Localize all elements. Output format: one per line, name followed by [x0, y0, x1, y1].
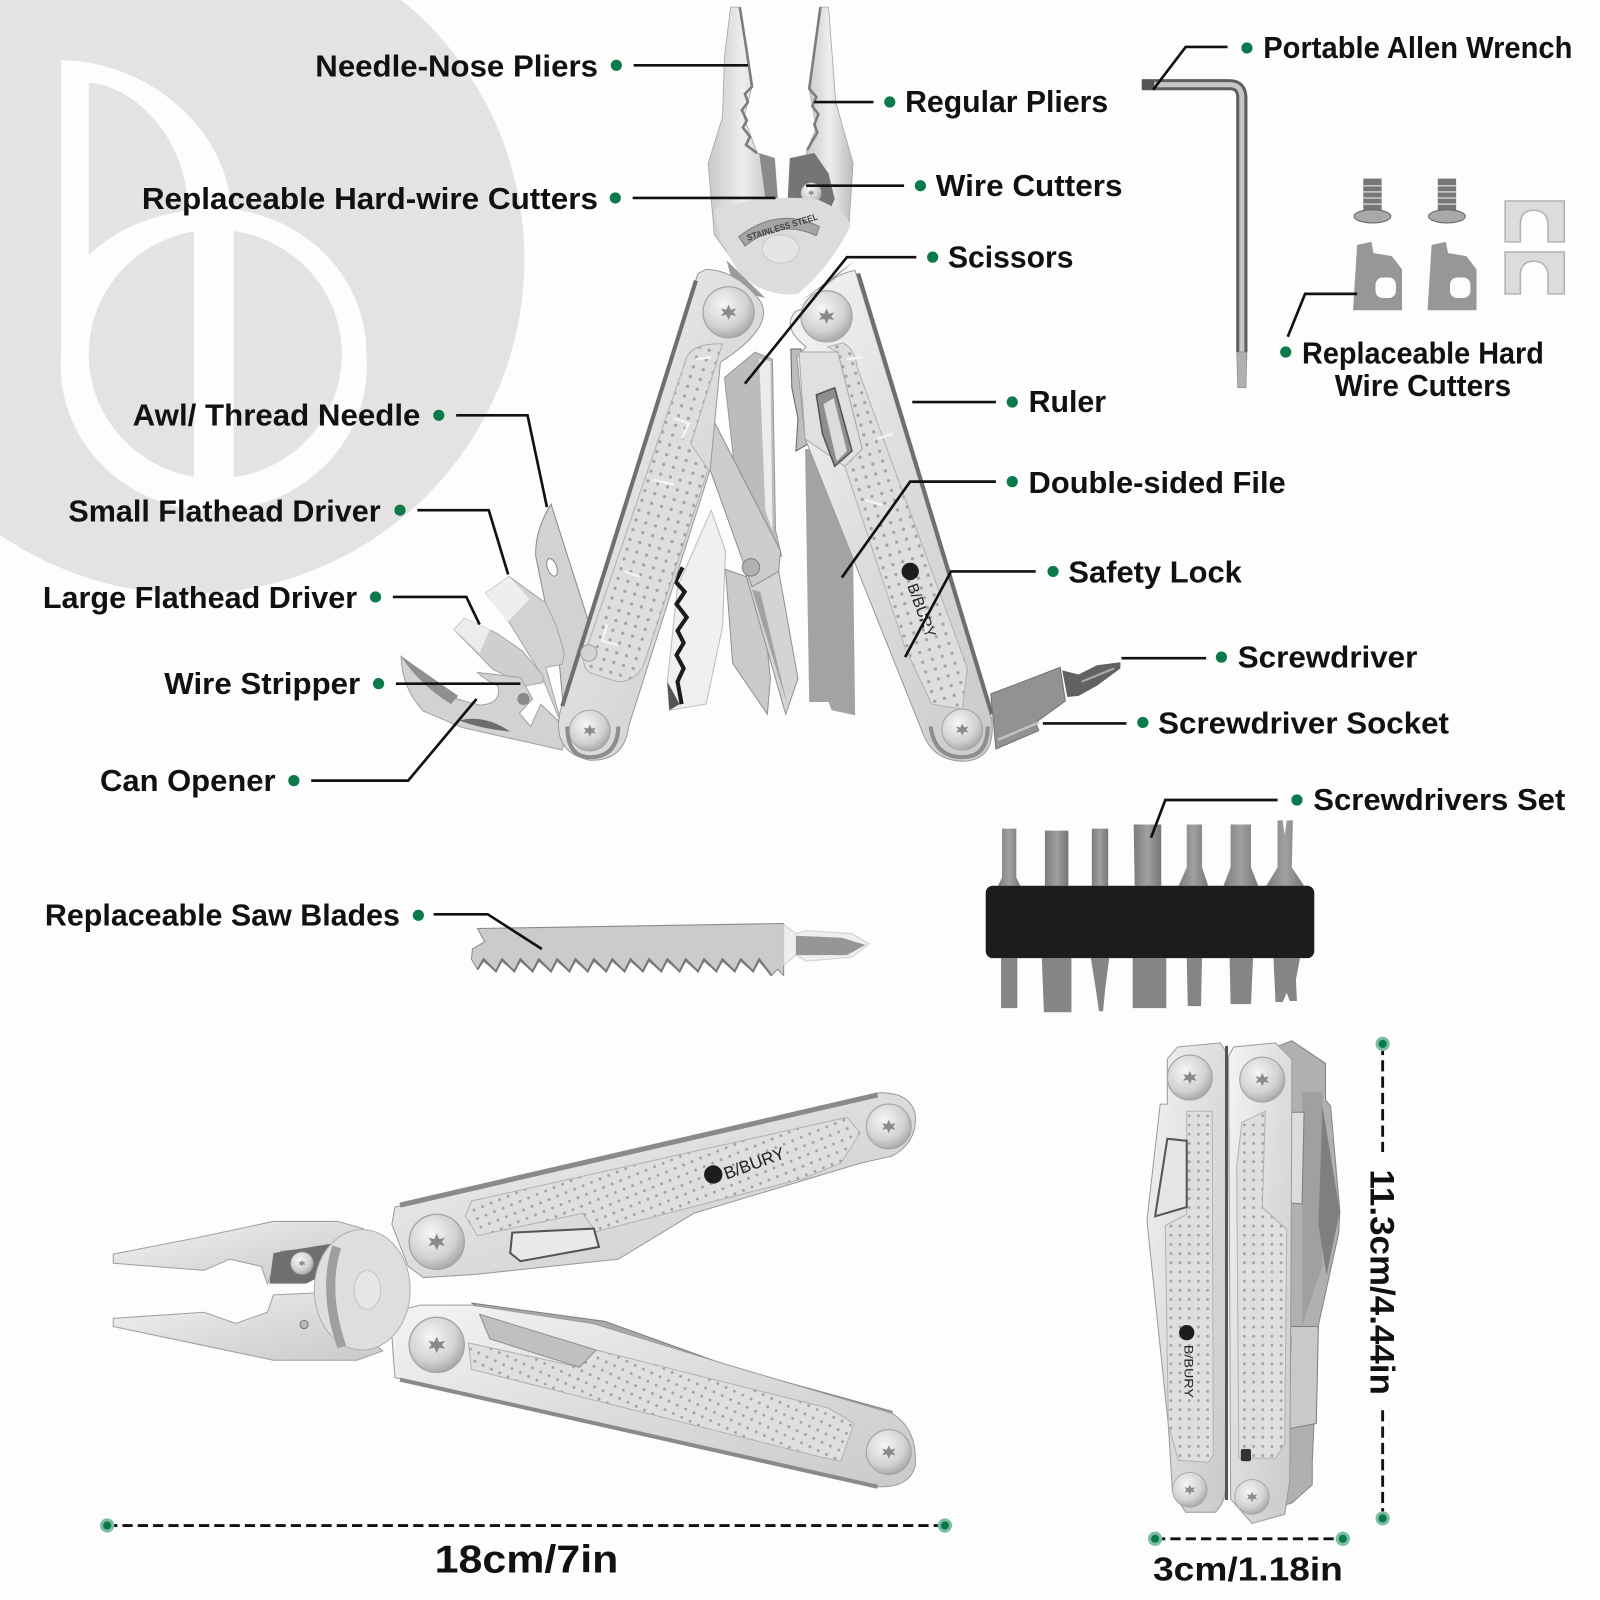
screwdriver bit set — [986, 820, 1314, 1012]
dimension: 11.3cm height: 11.3cm/4.44in — [1362, 1169, 1400, 1395]
folded left handle — [1147, 1043, 1226, 1512]
cutter 1 — [1353, 242, 1402, 310]
latch — [791, 349, 808, 451]
label: Portable Allen Wrench — [1153, 31, 1572, 90]
gray linkage behind head — [727, 260, 855, 301]
needle-nose jaw — [708, 7, 778, 265]
label: Ruler: Ruler — [1029, 385, 1106, 419]
folded left handle: B/BURY — [1182, 1345, 1196, 1398]
label: Replaceable Hard Wire Cutters: Replaceable Hard — [1302, 336, 1544, 370]
label: Double-sided File — [842, 466, 1286, 578]
label: Replaceable Hard Wire Cutters: Wire Cutters — [1335, 369, 1511, 403]
tools behind lower handle — [471, 1303, 898, 1449]
label: Replaceable Saw Blades: Replaceable Saw Blades — [45, 899, 400, 933]
label: Small Flathead Driver — [68, 494, 508, 574]
label: Ruler — [912, 385, 1106, 419]
upper jaw — [113, 1221, 363, 1284]
label: Replaceable Hard Wire Cutters — [1280, 294, 1544, 403]
label: Replaceable Saw Blades — [45, 899, 542, 949]
label: Wire Cutters: Wire Cutters — [936, 169, 1122, 203]
label: Replaceable Hard-wire Cutters: Replaceable Hard-wire Cutters — [142, 182, 598, 216]
cutter 2 — [1428, 242, 1477, 310]
pivot head — [714, 198, 850, 294]
spare screw 2 — [1429, 179, 1465, 223]
label: Screwdriver Socket — [1043, 707, 1449, 741]
screwdriver bit — [1062, 662, 1120, 697]
folded tool: small flathead — [486, 577, 564, 727]
dimension: 3cm width: 3cm/1.18in — [1153, 1552, 1343, 1589]
right handle — [790, 270, 992, 761]
side tool stack — [1265, 1041, 1340, 1510]
folded right handle — [1227, 1043, 1292, 1523]
folded tool: large flathead — [454, 618, 543, 686]
label: Regular Pliers: Regular Pliers — [905, 85, 1108, 119]
folded tool: can opener and wire stripper — [401, 656, 567, 750]
lower jaw — [113, 1293, 383, 1360]
label: Portable Allen Wrench: Portable Allen Wrench — [1263, 31, 1572, 65]
label: Can Opener: Can Opener — [100, 764, 276, 798]
left handle — [558, 269, 764, 760]
label: Safety Lock: Safety Lock — [1068, 556, 1243, 590]
label: Large Flathead Driver — [43, 581, 480, 624]
label: Awl / Thread Needle — [133, 399, 547, 507]
shim 1 — [1505, 201, 1564, 242]
upper handle: B/BURY — [721, 1143, 788, 1183]
label: Screwdriver: Screwdriver — [1238, 640, 1417, 674]
dimension: 18cm length: 18cm/7in — [435, 1538, 618, 1581]
saw blade — [471, 923, 869, 976]
label: Scissors: Scissors — [948, 240, 1073, 274]
closed-angle tool: width view — [113, 1093, 915, 1487]
spare screw 1 — [1354, 179, 1391, 223]
folded tool: length view — [1147, 1041, 1340, 1523]
right handle: B/BURY — [903, 581, 939, 640]
upper handle — [392, 1093, 915, 1278]
label: Can Opener — [100, 699, 477, 798]
bit holder — [986, 886, 1314, 958]
blade behind scissors — [724, 352, 782, 559]
label: Awl / Thread Needle: Awl/ Thread Needle — [133, 399, 420, 433]
folded tool: awl — [536, 504, 589, 716]
lower handle — [392, 1305, 915, 1487]
dimension: 11.3cm height — [1362, 1037, 1400, 1526]
label: Small Flathead Driver: Small Flathead Driver — [68, 494, 381, 528]
logo watermark — [0, 0, 524, 594]
bits lower — [1001, 958, 1300, 1012]
allen wrench — [1142, 81, 1247, 388]
serrated knife — [667, 510, 726, 710]
label: Regular Pliers — [814, 85, 1108, 119]
pivot disc — [314, 1230, 410, 1350]
screwdriver socket — [991, 667, 1065, 749]
label: Wire Stripper — [164, 667, 520, 701]
label: Needle-Nose Pliers: Needle-Nose Pliers — [315, 50, 598, 84]
label: Screwdriver Socket: Screwdriver Socket — [1158, 707, 1449, 741]
regular plier jaw — [788, 7, 853, 231]
file — [805, 449, 855, 715]
scissors — [693, 398, 798, 714]
label: Double-sided File: Double-sided File — [1029, 466, 1286, 500]
label: Screwdriver — [1121, 640, 1417, 674]
label: Scissors — [745, 240, 1073, 384]
dimension: 3cm width — [1148, 1532, 1350, 1589]
label: Screwdrivers Set — [1151, 783, 1565, 838]
label: Wire Cutters — [806, 169, 1122, 203]
dimension: 18cm length — [100, 1518, 952, 1581]
hardware kit: screws, cutters, shims — [1353, 179, 1564, 310]
label: Safety Lock — [905, 556, 1243, 657]
label: Wire Stripper: Wire Stripper — [164, 667, 360, 701]
bits upper — [998, 820, 1304, 886]
label: Needle-Nose Pliers — [315, 50, 748, 84]
pivot head: STAINLESS STEEL — [746, 212, 819, 243]
label: Large Flathead Driver: Large Flathead Driver — [43, 581, 357, 615]
main tool: open multitool — [401, 7, 1120, 761]
shim 2 — [1505, 252, 1564, 294]
label: Screwdrivers Set: Screwdrivers Set — [1313, 783, 1565, 817]
